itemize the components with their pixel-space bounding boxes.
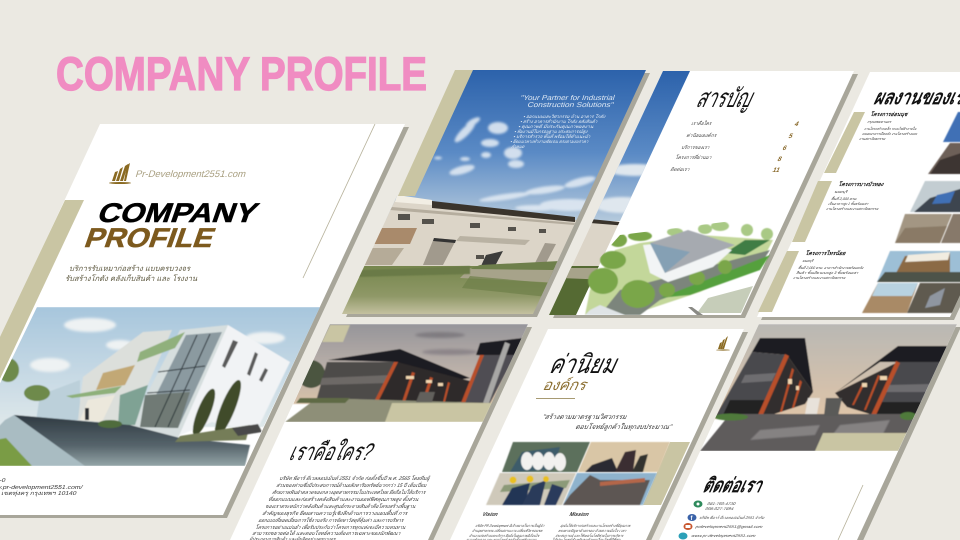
- phone numbers: 081-760-4730: [707, 501, 738, 506]
- logo: [109, 163, 131, 184]
- heading: เราคือใคร?: [285, 438, 379, 466]
- photo strip: sky and warehouse: [549, 71, 690, 315]
- company description: สำคัญของธุรกิจ ยึดผสานความรู้เชิงลึกด้านการวางแผนพื้นที่ การ: [261, 509, 410, 517]
- quote: "สร้างตามมาตรฐานวิศวกรรม: [541, 413, 629, 421]
- panel: who we are page: [230, 324, 540, 540]
- panel: corporate values page: [450, 329, 748, 540]
- project captions: เป็นอาคารสูง 1 ชั้นพร้อมเสา: [828, 200, 870, 206]
- page numbers: 6: [781, 145, 788, 152]
- project captions: พื้นที่ 2,000 ตรม. อาคารสำนักงานพร้อมคลัง: [797, 264, 865, 270]
- website: Pr-Development2551.com: [134, 169, 247, 180]
- contents list: [669, 120, 718, 173]
- service bullets: [510, 113, 607, 149]
- page numbers: 11: [771, 167, 781, 174]
- project captions: โครงการไทรน้อย: [803, 249, 848, 257]
- team photo grid: [486, 442, 670, 505]
- divider line: [838, 485, 863, 540]
- khaki strip: [397, 70, 475, 198]
- heading: สารบัญ: [692, 83, 760, 113]
- company description: บริษัท พีอาร์ ดีเวลลอปเม้นท์ 2551 จำกัด ก่อตั้งขึ้นปี พ.ศ. 2565 โดยทีมผู้: [278, 474, 432, 482]
- service bullets: • ยึดแนวทางทำงานชัดเจน ตรงตามงบราคา: [510, 139, 590, 144]
- panel: corporate values page: ประสบการณ์ และใช้เทคโนโลยีช่วยในการบริหาร: [555, 533, 625, 538]
- panel: brochure page with warehouse and sky: [340, 70, 650, 317]
- project captions: งานโครงสร้างและงานสถาปัตยกรรม: [826, 206, 880, 211]
- page numbers: 4: [793, 121, 800, 128]
- company name: บริษัท พีอาร์ ดีเวลลอปเม้นท์ 2551 จำกัด: [699, 515, 766, 520]
- project captions: พื้นที่ 2,000 ตรม.: [830, 195, 859, 201]
- service bullets: • คุณภาพดี มีประกันคุณภาพผลงาน: [517, 123, 596, 130]
- panel: contact page: [659, 324, 960, 540]
- photo: office building: [0, 307, 330, 466]
- icon: email: [684, 523, 692, 530]
- small site photo: [697, 286, 753, 313]
- cover subtitle: บริการรับเหมาก่อสร้าง แบบครบวงจร: [68, 264, 192, 273]
- phone numbers: [705, 501, 738, 511]
- vision and mission: Vision: [481, 512, 499, 518]
- project captions: งานโครงสร้างเหล็ก ระบบไฟฟ้าภายใน: [864, 125, 919, 131]
- project captions: สินค้า ชั้นเดียวแบบสูง 3 ชั้นพร้อมเสา: [795, 269, 860, 275]
- service bullets: • สร้าง อาคารสำนักงาน โกดัง คลังสินค้า: [520, 118, 600, 124]
- panel: corporate values page: บริษัท PR Development มีเป้าหมายในการเป็นผู้นำ: [474, 522, 546, 529]
- photo: aerial site rendering: [585, 221, 773, 315]
- panel: cover page: [0, 124, 409, 518]
- company description: ที่ออกแบบและก่อสร้างคลังสินค้าและงานออฟฟิศคุณภาพสูง ตั้งส่วน: [267, 495, 421, 503]
- panel: cover page: รับสร้างโกดัง คลังเก็บสินค้า และ โรงงาน: [64, 273, 200, 283]
- icon: facebook: [688, 514, 696, 522]
- contents list: บริการของเรา: [680, 144, 711, 151]
- project captions: [793, 110, 919, 280]
- photo: warehouse under blue sky: [340, 70, 650, 316]
- page numbers: [771, 121, 800, 174]
- panel: corporate values page: ด้านอุตสาหกรรม เปลี่ยนสถานะงาน เปลี่ยนชีวิต ขอบเขต: [471, 528, 544, 534]
- panel: brochure page with warehouse and sky: Construction Solutions": [526, 101, 615, 109]
- company description: สามารถขยายต่อได้ และตอบโจทย์ความต้องการเฉพาะของนักพัฒนา: [251, 530, 402, 537]
- heading: COMPANY PROFILE: COMPANY PROFILE: [56, 47, 427, 100]
- icon: website: [678, 532, 688, 540]
- divider line: [303, 124, 375, 278]
- panel: corporate values page: Mission: [568, 512, 590, 518]
- project captions: กรุงเทพมหานคร: [866, 120, 892, 125]
- warehouse wall: [364, 200, 576, 266]
- panel: cover page: PROFILE: [81, 223, 219, 253]
- project captions: โครงการบางบัวทอง: [836, 180, 886, 188]
- service bullets: กำหนด: [511, 144, 526, 149]
- contents list: ค่านิยมองค์กร: [685, 132, 718, 139]
- company description: ศักยภาพฟันฝ่าตลาดของกลางอุตสาหกรรมในประเทศไทย ยึดถือไม่ให้บริการ: [271, 489, 427, 496]
- contents list: เราคือใคร: [690, 120, 713, 127]
- slogan: "Your Partner for Industrial: [519, 94, 616, 102]
- project captions: โครงการอ่อนนุช: [868, 110, 910, 118]
- service bullets: • ออกแบบและวิศวกรรม บ้าน อาคาร โกดัง: [523, 113, 607, 119]
- company description: ออกแบบที่ยอดเยี่ยมการใช้งานจริง การจัดหาวัสดุที่คุ้มค่า และการบริหาร: [257, 516, 406, 524]
- lawn and hedge: [342, 266, 556, 314]
- khaki strip: [0, 200, 84, 400]
- company description: [248, 474, 432, 540]
- panel: our works page: [757, 72, 960, 320]
- company description: ส่วนของท่านซึ่งมีประสบการณ์ด้านอสังหาริมทรัพย์มากกว่า 15 ปี เต็มเปี่ยม: [275, 481, 429, 489]
- page numbers: 8: [776, 156, 783, 163]
- heading: ติดต่อเรา: [700, 475, 768, 497]
- heading: ค่านิยม: [545, 349, 625, 379]
- company description: โครงการอย่างแม่นยำ เพื่อรับประกันว่าโครงการทุกแห่งจะมีความทนทาน: [254, 523, 408, 531]
- website address: www.pr-development2551.com: [691, 533, 757, 538]
- icon: phone: [694, 500, 702, 508]
- panel: corporate values page: องค์กร: [540, 377, 592, 394]
- service bullets: • ทีมงานมีใบกรอบฐาน ประสบการณ์สูง: [513, 128, 589, 135]
- service bullets: • บริการสำรวจ พื้นที่ พร้อมให้คำแนะนำ: [513, 133, 593, 139]
- email address: prdevelopment2551@gmail.com: [695, 524, 764, 529]
- contents list: โครงการที่ผ่านมา: [674, 153, 714, 161]
- photo: dusk warehouse: [280, 324, 540, 422]
- panel: corporate values page: ด้านงานก่อสร้างและบริการ ยึดมั่นในคุณภาพมีเงื่อนไข: [468, 533, 541, 539]
- logo: [716, 336, 730, 351]
- project captions: งานโครงสร้างและงานสถาปัตยกรรม: [793, 275, 847, 280]
- contents list: ติดต่อเรา: [669, 166, 691, 173]
- page numbers: 5: [787, 133, 794, 140]
- photo: warehouse street: [695, 324, 960, 451]
- project photo grid: [862, 112, 960, 313]
- cover footer address: [0, 478, 84, 497]
- cover title: COMPANY: [94, 198, 263, 228]
- project captions: นนทบุรี: [801, 258, 815, 264]
- panel: corporate values page: ตรงตามปัญหาด้วยกรอบ ด้วยความมั่นใจ เวลา: [558, 528, 628, 533]
- company description: ของเราตระหนักว่าคลังสินค้าและศูนย์กระจายสินค้าคือโครงสร้างพื้นฐาน: [264, 502, 418, 510]
- panel: table of contents page: [540, 71, 858, 318]
- project captions: ตลอดอาคารเปิดหลัง งานโครงสร้างและ: [862, 131, 919, 136]
- khaki strips: [758, 112, 865, 312]
- panel: corporate values page: ตอบโจทย์ลูกค้าในทุกงบประมาณ": [574, 422, 675, 431]
- project captions: งานสถาปัตยกรรม: [859, 136, 887, 141]
- project captions: นนทบุรี: [833, 189, 849, 195]
- icon: facebook: f: [690, 516, 694, 522]
- khaki backing: [643, 442, 690, 505]
- phone numbers: 098-027-7894: [705, 506, 736, 511]
- panel: corporate values page: มุ่งมั่นให้บริการก่อสร้างและงานโครงสร้างที่มีคุณภาพ: [559, 523, 632, 529]
